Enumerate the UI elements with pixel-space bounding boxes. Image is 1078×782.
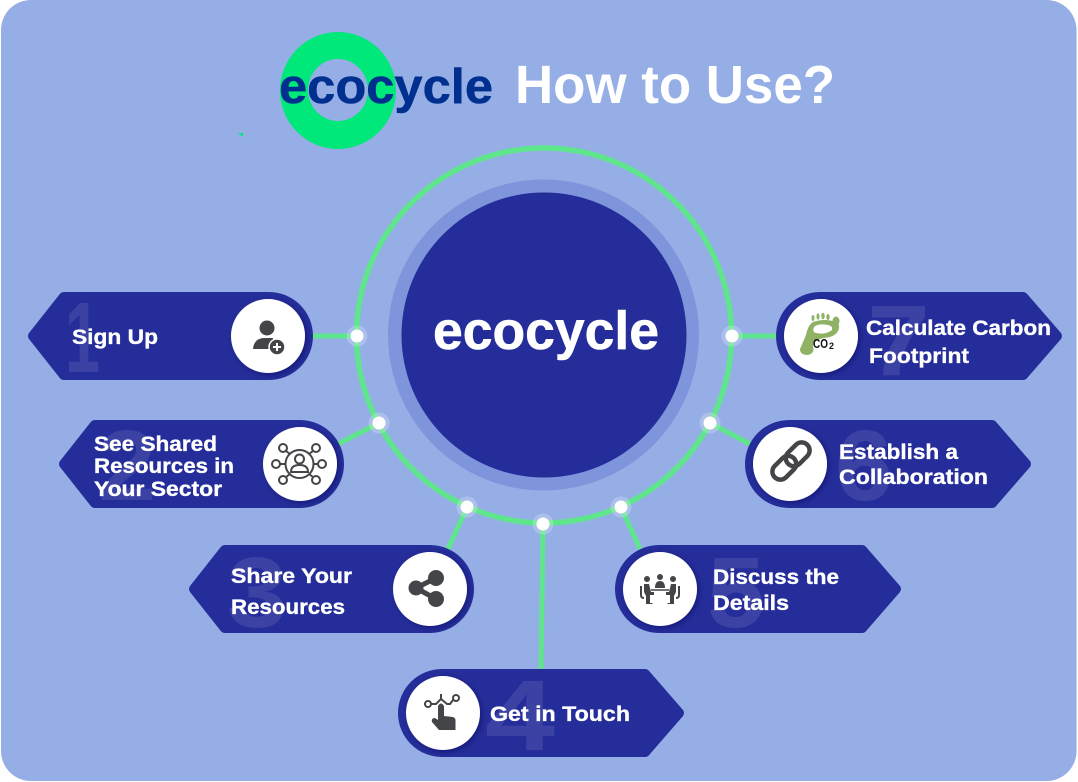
step 2: See Shared Resources in Your Sector: Your Sector (94, 477, 223, 501)
step 7: Calculate Carbon Footprint: Footprint (869, 344, 969, 368)
small green mark (238, 133, 243, 137)
icon: add user (253, 320, 285, 355)
step 4: Get in Touch: 4 (485, 660, 555, 772)
title: How to Use? (515, 55, 835, 115)
step 2: See Shared Resources in Your Sector: Resources in (94, 454, 234, 478)
step 3: Share Your Resources (189, 537, 474, 649)
connector lines (310, 336, 779, 671)
icon: network (272, 444, 326, 484)
icon: CO2 footprint: CO (813, 336, 828, 351)
icon: touch (425, 694, 459, 730)
step 2: See Shared Resources in Your Sector (59, 410, 344, 522)
step 6: Establish a Collaboration: Establish a (839, 440, 959, 464)
logo: ecocycle (279, 32, 493, 149)
logo: ecocycle: ecocycle (279, 60, 493, 114)
central circle: ecocycle (388, 180, 699, 490)
step 7: Calculate Carbon Footprint: Calculate Carbon (866, 316, 1051, 340)
step 5: Discuss the Details: Discuss the (713, 565, 839, 589)
icon: CO2 footprint (800, 313, 840, 355)
step 1: Sign Up: 1 (65, 282, 100, 394)
step 5: Discuss the Details: Details (713, 591, 789, 615)
step 7: Calculate Carbon Footprint: 7 (867, 285, 930, 397)
step 1: Sign Up: Sign Up (72, 325, 158, 349)
step 4: Get in Touch: Get in Touch (490, 702, 630, 726)
step 6: Establish a Collaboration: 6 (835, 410, 893, 522)
step 5: Discuss the Details (615, 537, 901, 649)
icon: chain link (769, 439, 813, 483)
step 3: Share Your Resources: Share Your (231, 564, 353, 588)
central circle: ecocycle: ecocycle (433, 301, 659, 361)
outer green ring (356, 148, 732, 523)
icon: meeting (641, 574, 679, 604)
step 6: Establish a Collaboration: Collaboration (839, 465, 988, 489)
step 1: Sign Up (28, 282, 313, 394)
step 7: Calculate Carbon Footprint (776, 285, 1062, 397)
step 6: Establish a Collaboration (745, 410, 1031, 522)
icon: CO2 footprint: 2 (829, 341, 834, 351)
step 2: See Shared Resources in Your Sector: See Shared (94, 432, 217, 456)
step 5: Discuss the Details: 5 (707, 537, 765, 649)
step 3: Share Your Resources: Resources (231, 595, 345, 619)
step 2: See Shared Resources in Your Sector: 2 (98, 410, 156, 522)
icon: share (408, 570, 444, 607)
step 4: Get in Touch (398, 660, 684, 772)
step 3: Share Your Resources: 3 (227, 537, 287, 649)
ring nodes (346, 326, 742, 534)
